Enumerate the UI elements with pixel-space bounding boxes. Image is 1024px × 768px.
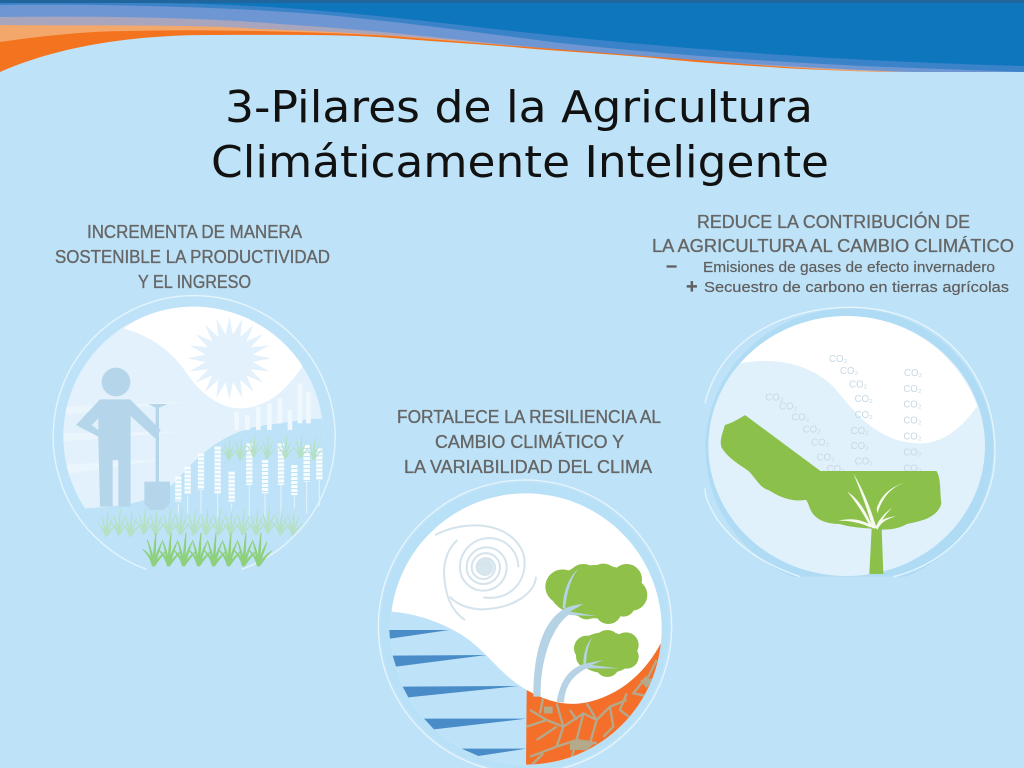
title: [211, 82, 829, 188]
CO2 labels: CO₂: [904, 368, 922, 379]
panel: carbon and tree circle: [700, 307, 1000, 592]
CO2 labels: CO₂: [827, 464, 845, 475]
CO2 labels: CO₂: [903, 384, 922, 395]
CO2 labels: CO₂: [855, 457, 873, 468]
CO2 labels: CO₂: [851, 441, 869, 452]
heading: resilience pillar: [397, 407, 661, 477]
icon: farmer with shovel: [76, 368, 170, 510]
icon: blue waves: [389, 630, 527, 756]
heading: productivity pillar: Y EL INGRESO: [138, 272, 251, 292]
CO2 labels: CO₂: [829, 354, 847, 365]
CO2 labels: CO₂: [765, 392, 784, 403]
title: 3-Pilares de la Agricultura: [225, 82, 813, 133]
CO2 labels: CO₂: [903, 400, 922, 411]
heading: mitigation pillar: –: [666, 255, 677, 277]
CO2 labels: CO₂: [779, 402, 797, 413]
CO2 labels: CO₂: [817, 453, 835, 464]
heading: productivity pillar: [55, 222, 330, 292]
CO2 labels: CO₂: [903, 447, 922, 458]
CO2 labels: [765, 354, 922, 475]
CO2 labels: CO₂: [803, 424, 821, 435]
CO2 labels: CO₂: [903, 463, 922, 474]
heading: resilience pillar: FORTALECE LA RESILIENCIA AL: [397, 407, 661, 427]
icon: tree: [722, 417, 940, 574]
heading: mitigation pillar: Emisiones de gases de efecto invernadero: [703, 259, 995, 276]
CO2 labels: CO₂: [791, 412, 810, 423]
heading: mitigation pillar: [652, 211, 1014, 298]
CO2 labels: CO₂: [903, 432, 922, 443]
heading: mitigation pillar: LA AGRICULTURA AL CAMBIO CLIMÁTICO: [652, 236, 1014, 256]
CO2 labels: CO₂: [855, 410, 873, 421]
CO2 labels: CO₂: [811, 438, 829, 449]
CO2 labels: CO₂: [851, 426, 869, 437]
heading: resilience pillar: CAMBIO CLIMÁTICO Y: [435, 432, 624, 452]
icon: wind-blown trees: [533, 564, 647, 703]
pale grass row: [97, 433, 323, 537]
header wave banner: [0, 0, 1024, 80]
heading: productivity pillar: SOSTENIBLE LA PRODUCTIVIDAD: [55, 247, 330, 267]
icon: cracked dry soil: [523, 640, 663, 768]
heading: resilience pillar: LA VARIABILIDAD DEL CLIMA: [404, 457, 652, 477]
CO2 labels: CO₂: [849, 379, 867, 390]
panel: farmer and crops circle: [53, 296, 340, 590]
CO2 labels: CO₂: [903, 416, 922, 427]
wheat stalks: [178, 443, 319, 517]
green grass row: [143, 533, 272, 566]
icon: spiral storm: [435, 525, 536, 620]
CO2 labels: CO₂: [855, 394, 873, 405]
heading: mitigation pillar: REDUCE LA CONTRIBUCIÓN DE: [697, 211, 970, 232]
title: Climáticamente Inteligente: [211, 137, 829, 188]
heading: mitigation pillar: +: [686, 276, 698, 298]
CO2 labels: CO₂: [840, 366, 858, 377]
sea: [390, 612, 527, 764]
icon: sun: [188, 317, 271, 400]
panel: climate resilience circle: [370, 480, 672, 768]
heading: productivity pillar: INCREMENTA DE MANERA: [87, 222, 302, 242]
heading: mitigation pillar: Secuestro de carbono en tierras agrícolas: [704, 279, 1009, 296]
